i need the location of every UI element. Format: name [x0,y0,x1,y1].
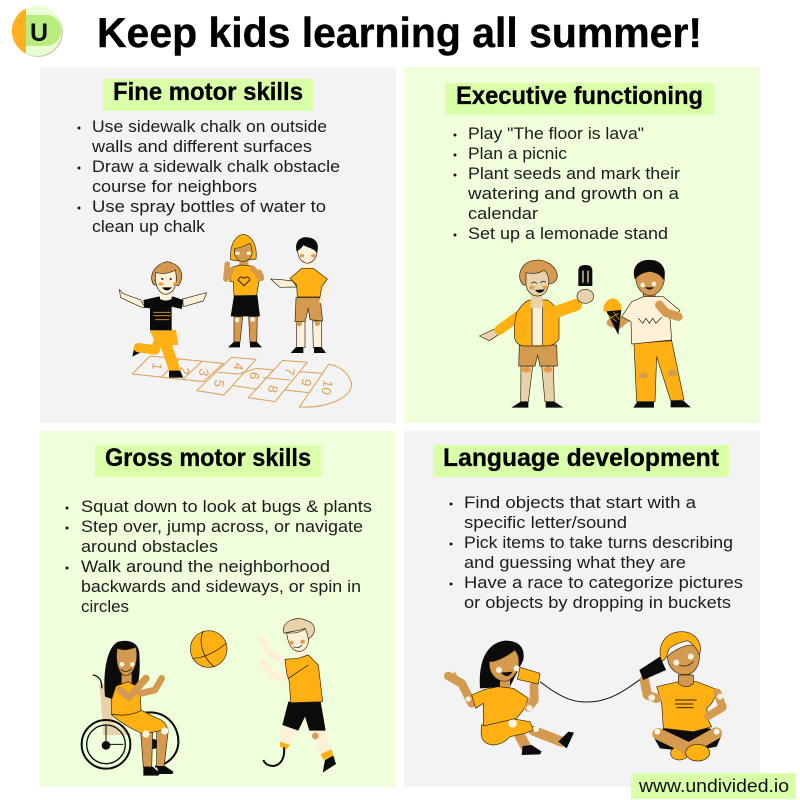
hopscotch grid: 5 [211,378,227,388]
hopscotch grid: 4 [230,361,246,372]
heading: language development: Language development [443,444,720,472]
illustration: children playing with a ball [82,619,336,776]
website label: www.undivided.io [638,776,789,796]
list: executive functioning activities: watering and growth on a [467,184,680,203]
illustration: children with tin can telephone [448,632,723,761]
list: gross motor activities: Squat down to look at bugs & plants [81,497,372,516]
string [540,678,642,702]
hopscotch grid [132,356,352,407]
list: language activities: specific letter/sound [464,513,627,532]
list: gross motor activities: around obstacles [81,537,218,556]
list: executive functioning activities: Play "The floor is lava" [468,124,644,143]
hopscotch grid: 7 [282,366,298,376]
hopscotch grid: 1 [149,361,165,371]
logo [12,6,63,57]
panel: executive functioning [404,67,760,423]
panel: fine motor skills [40,67,396,423]
boy with ice cream [603,260,691,408]
hopscotch grid: 2 [176,366,192,376]
heading: fine motor skills: Fine motor skills [113,78,303,106]
illustration: children with popsicle and ice cream [479,260,691,408]
list: fine motor activities: course for neighbors [92,177,257,196]
list: gross motor activities: Walk around the neighborhood [81,557,330,576]
list: gross motor activities: Step over, jump across, or navigate [81,517,363,536]
heading: executive functioning: Executive functioning [456,82,703,110]
boy hopping [119,262,207,378]
boy with popsicle [479,260,594,408]
list: language activities: Pick items to take turns describing [464,533,733,552]
list: language activities: Have a race to categorize pictures [464,573,743,592]
boy with can [639,632,723,761]
hopscotch grid: 8 [265,384,281,394]
list: fine motor activities: clean up chalk [92,217,206,236]
list: gross motor activities: circles [81,597,129,616]
list: fine motor activities: Draw a sidewalk chalk obstacle [92,157,340,176]
hopscotch grid: 3 [196,367,212,377]
list: language activities [450,493,743,612]
list: gross motor activities [66,497,372,616]
girl with can [448,641,574,755]
heading: gross motor skills: Gross motor skills [105,444,311,472]
illustration: children playing hopscotch [119,234,352,407]
list: language activities: Find objects that start with a [464,493,697,512]
list: language activities: or objects by dropping in buckets [464,593,731,612]
boy throwing with prosthetic leg [262,619,336,773]
list: gross motor activities: backwards and sideways, or spin in [81,577,361,596]
list: fine motor activities: Use spray bottles of water to [92,197,326,216]
panel: language development [404,431,760,787]
logo: U [30,19,48,47]
boy pointing [271,237,327,353]
website label [631,773,796,799]
hopscotch grid: 6 [246,371,262,381]
list: fine motor activities [78,117,340,236]
girl in wheelchair [82,641,178,776]
list: language activities: and guessing what they are [464,553,686,572]
list: executive functioning activities: Plant seeds and mark their [468,164,680,183]
girl with heart shirt [226,234,263,347]
list: fine motor activities: walls and different surfaces [91,137,312,156]
list: executive functioning activities [454,124,680,243]
list: executive functioning activities: Plan a picnic [468,144,568,163]
title: Keep kids learning all summer! [97,9,702,56]
panel: gross motor skills [40,431,396,787]
list: fine motor activities: Use sidewalk chalk on outside [92,117,327,136]
list: executive functioning activities: Set up a lemonade stand [468,224,668,243]
ball [190,631,227,667]
hopscotch grid: 10 [318,379,336,396]
hopscotch grid: 9 [298,377,314,387]
list: executive functioning activities: calendar [468,204,538,223]
